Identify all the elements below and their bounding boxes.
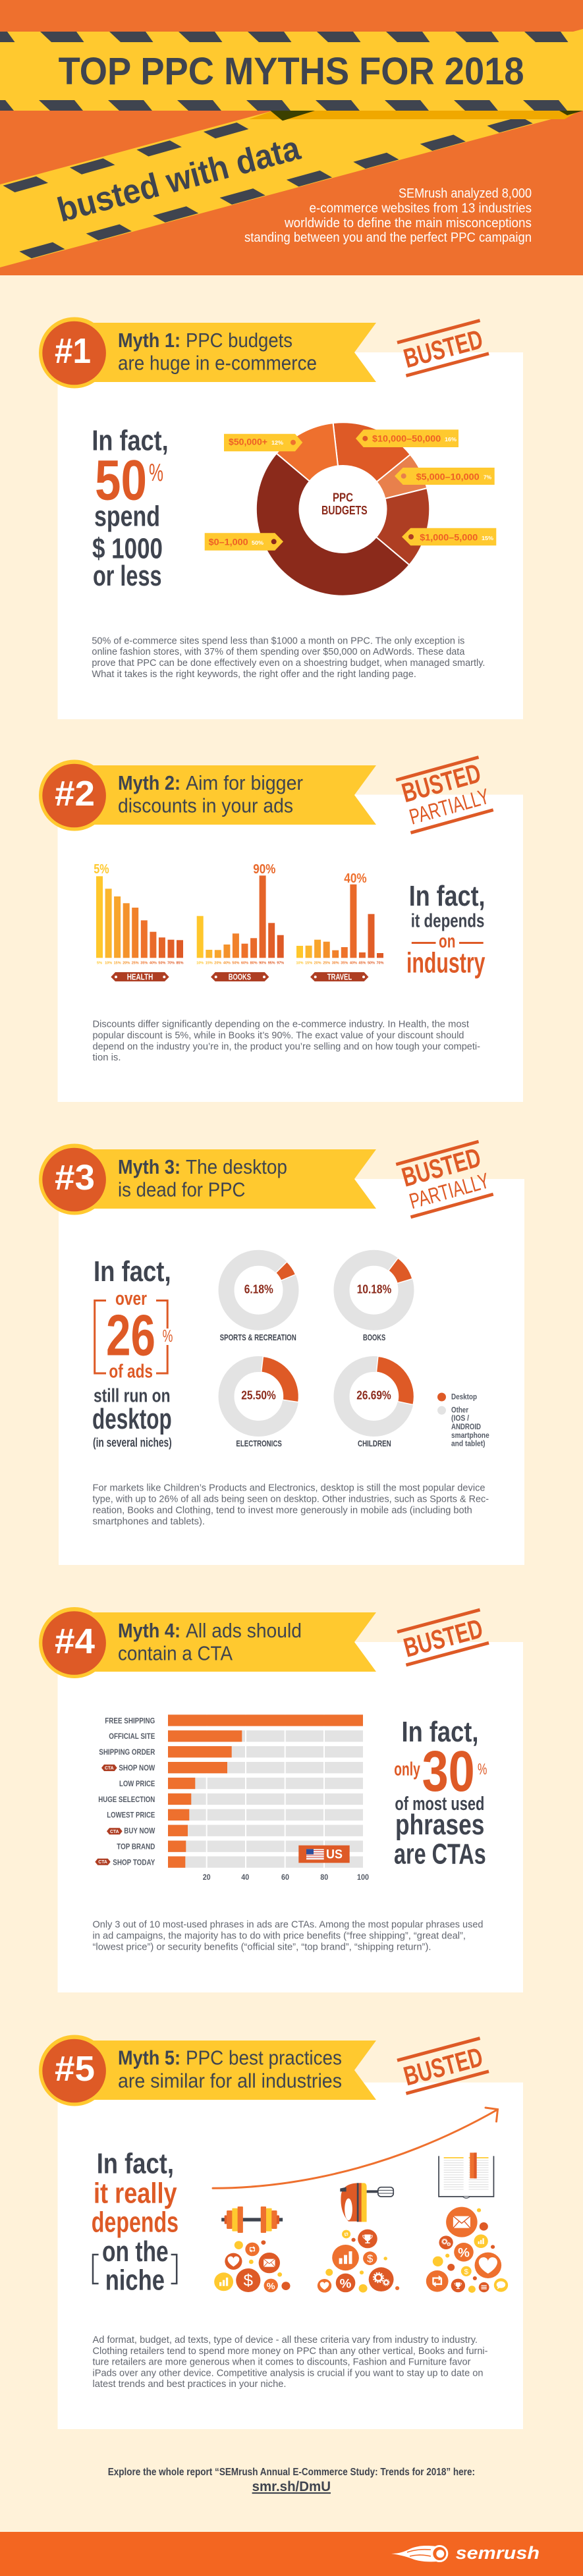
body paragraph: Ad format, budget, ad texts, type of device - all these criteria vary from industry to industry. <box>92 2334 478 2345</box>
chart: travel: 40% <box>344 871 367 886</box>
tag: $10,000-50,000: $10,000–50,000 <box>372 433 441 444</box>
bar labels: TOP BRAND <box>117 1842 155 1851</box>
CTA tags <box>95 1765 123 1865</box>
number badge: #3 <box>55 1158 95 1197</box>
chart: health: HEALTH <box>127 972 153 982</box>
chart: travel <box>296 871 384 982</box>
chart: travel: 70% <box>376 962 384 966</box>
call to action: report link: Explore the whole report “SEMrush Annual E-Commerce Study: Trends for 2018” here: <box>108 2467 475 2478</box>
title: TOP PPC MYTHS FOR 2018 <box>59 50 524 93</box>
donut: children: 26.69% <box>356 1389 391 1402</box>
myth heading: Aim for bigger <box>186 771 303 794</box>
myth heading: PPC budgets <box>186 329 292 352</box>
US badge <box>298 1846 350 1863</box>
myth heading: Myth 5: <box>118 2046 180 2069</box>
myth heading: is dead for PPC <box>118 1178 245 1201</box>
icon: dumbbell <box>221 2206 283 2233</box>
panel background <box>58 2083 523 2429</box>
donut: books: BOOKS <box>363 1332 386 1342</box>
icon group: home goods marketing bubbles: $ <box>367 2253 373 2265</box>
key fact text: phrases <box>395 1809 484 1841</box>
horizontal bar chart: most used phrases <box>95 1713 369 1882</box>
US badge: US <box>326 1848 343 1862</box>
body paragraph: in ad campaigns, the majority has to do with price benefits (“free shipping”, “great deal”, <box>92 1930 466 1941</box>
chart: travel: 40% <box>350 962 357 966</box>
body paragraph: depend on the industry you’re in, the product you’re selling and on how tough your competi- <box>92 1041 480 1052</box>
key fact text: 50 <box>95 449 147 512</box>
stamp: busted partially: BUSTED <box>399 757 484 808</box>
body paragraph: Only 3 out of 10 most-used phrases in ads are CTAs. Among the most popular phrases used <box>92 1919 484 1930</box>
bar labels: SHOP TODAY <box>113 1857 155 1867</box>
bar labels: FREE SHIPPING <box>105 1716 155 1725</box>
stamp: busted <box>397 319 489 377</box>
stamp: busted: BUSTED <box>401 2041 486 2091</box>
key fact text: In fact, <box>92 425 169 457</box>
axis labels: 40 <box>241 1873 250 1882</box>
bar labels: SHIPPING ORDER <box>99 1747 155 1757</box>
body paragraph <box>92 1019 480 1063</box>
call to action: report link: smr.sh/DmU <box>252 2479 331 2494</box>
number badge: #4 <box>55 1622 95 1661</box>
legend <box>437 1392 489 1448</box>
panel: myth 1 <box>39 317 523 719</box>
bar labels <box>98 1716 155 1867</box>
tag: $5,000-10,000 <box>395 468 495 485</box>
stamp: busted: BUSTED <box>401 323 486 373</box>
key fact text: of ads <box>109 1361 153 1383</box>
donut: books: 10.18% <box>357 1283 391 1296</box>
tag: $10,000-50,000 <box>356 429 458 447</box>
tag: $0-1,000: 50% <box>252 540 264 546</box>
key fact text: In fact, <box>402 1716 478 1748</box>
myth heading: Myth 3: <box>118 1155 180 1178</box>
intro text: e-commerce websites from 13 industries <box>310 202 532 216</box>
myth heading: Myth 2: <box>118 771 180 794</box>
myth heading: All ads should <box>186 1619 302 1642</box>
key fact text: % <box>478 1761 487 1778</box>
body paragraph: 50% of e-commerce sites spend less than $1000 a month on PPC. The only exception is <box>92 635 464 646</box>
body paragraph <box>92 1919 484 1952</box>
myth ribbon <box>86 765 376 825</box>
key fact text <box>92 425 169 592</box>
key fact text: on the <box>102 2235 169 2268</box>
icon group: fitness marketing bubbles <box>214 2240 291 2292</box>
icon group: home goods marketing bubbles <box>318 2230 399 2293</box>
chart centre label: BUDGETS <box>321 504 368 517</box>
key fact text: on <box>439 931 455 952</box>
chart: health: 70% <box>167 962 175 966</box>
legend: Other <box>451 1405 468 1414</box>
chart: health: 5% <box>94 862 109 877</box>
bar labels: BUY NOW <box>124 1826 155 1836</box>
tag: $1,000-5,000 <box>402 528 496 545</box>
key fact text: of most used <box>395 1794 484 1815</box>
chart: books: 15% <box>206 962 213 966</box>
key fact text: depends <box>92 2206 179 2238</box>
body paragraph: online fashion stores, with 37% of them spending over $50,000 on AdWords. These data <box>92 646 465 657</box>
panel: myth 4 <box>39 1607 523 1992</box>
donut: children: CHILDREN <box>358 1439 391 1448</box>
chart: books: 10% <box>196 962 204 966</box>
stamp: busted partially: PARTIALLY <box>406 784 492 829</box>
key fact text: it depends <box>411 911 484 932</box>
number badge <box>39 1607 110 1678</box>
number badge: #5 <box>55 2049 95 2089</box>
chart: books: 90% <box>253 862 275 877</box>
legend: and tablet) <box>451 1439 485 1448</box>
panel background <box>58 352 523 719</box>
key fact text: spend <box>94 501 160 532</box>
chart: health: 5% <box>97 962 102 966</box>
myth heading: Myth 4: <box>118 1619 180 1642</box>
body paragraph: For markets like Children’s Products and Electronics, desktop is still the most popular device <box>92 1483 485 1494</box>
stamp: busted partially: PARTIALLY <box>406 1168 492 1213</box>
tag: $50,000+: $50,000+ <box>229 437 267 447</box>
donut: children <box>341 1356 414 1448</box>
body paragraph: smartphones and tablets). <box>92 1516 205 1527</box>
chart: books: 80% <box>250 962 258 966</box>
header orange background <box>0 0 583 275</box>
key fact text: (in several niches) <box>93 1437 172 1450</box>
icon group: books marketing bubbles: $ <box>464 2268 469 2276</box>
chart: travel: 50% <box>368 962 375 966</box>
myth heading <box>118 329 317 374</box>
donut: electronics: ELECTRONICS <box>236 1439 282 1448</box>
chart: travel: 10% <box>296 962 304 966</box>
chart: travel: 15% <box>305 962 312 966</box>
CTA tags: CTA <box>98 1860 107 1865</box>
chart: books: 20% <box>214 962 221 966</box>
body paragraph: reation, Books and Clothing, tend to invest more generously in mobile ads (including both <box>92 1504 472 1516</box>
tag: $50,000+: 12% <box>271 440 283 446</box>
tag: $10,000-50,000: 16% <box>445 437 457 443</box>
chart: health: 50% <box>158 962 166 966</box>
CTA tags: CTA <box>110 1830 119 1834</box>
chart: books: 40% <box>223 962 231 966</box>
body paragraph <box>92 2334 487 2390</box>
chart: health: 20% <box>123 962 130 966</box>
donut: electronics: 25.50% <box>241 1389 276 1402</box>
tag: $1,000-5,000: $1,000–5,000 <box>420 532 478 542</box>
subtitle on tape: busted with data <box>53 129 304 230</box>
stamp: busted: BUSTED <box>401 1613 486 1663</box>
key fact text: still run on <box>94 1385 170 1406</box>
key fact text: are CTAs <box>394 1838 486 1870</box>
number badge <box>39 1143 110 1215</box>
axis labels <box>203 1873 369 1882</box>
myth heading: discounts in your ads <box>118 794 293 817</box>
myth heading <box>118 1619 302 1665</box>
number badge: #1 <box>55 331 91 371</box>
panel: myth 5 <box>39 2035 523 2429</box>
bar labels: HUGE SELECTION <box>98 1795 155 1804</box>
key fact text: $ 1000 <box>92 533 163 565</box>
donut: electronics <box>227 1356 299 1448</box>
tag: $5,000-10,000: 7% <box>484 474 491 481</box>
tag: $1,000-5,000: 15% <box>482 535 493 541</box>
stamp: busted partially: BUSTED <box>399 1142 484 1193</box>
chart centre label: PPC <box>333 491 353 505</box>
tag: $50,000+ <box>224 434 302 451</box>
stamp: busted partially <box>396 1140 493 1219</box>
diagonal caution tape <box>0 111 583 267</box>
chart: travel: 20% <box>314 962 321 966</box>
axis labels: 60 <box>281 1873 289 1882</box>
myth heading: PPC best practices <box>186 2046 342 2069</box>
bar labels: OFFICIAL SITE <box>109 1732 155 1741</box>
chart: books: 97% <box>277 962 284 966</box>
chart: health: 15% <box>114 962 121 966</box>
myth heading <box>118 2046 342 2093</box>
number badge: #2 <box>55 774 95 813</box>
donut: sports and recreation: SPORTS & RECREATION <box>220 1332 296 1342</box>
body paragraph: Discounts differ significantly depending on the e-commerce industry. In Health, the most <box>92 1019 470 1030</box>
arrow: rising trend <box>213 2108 498 2188</box>
key fact text: 30 <box>422 1740 475 1803</box>
axis labels: 20 <box>203 1873 211 1882</box>
icon group: fitness marketing bubbles: $ <box>244 2272 253 2290</box>
chart: health: 25% <box>132 962 139 966</box>
body paragraph: “lowest price”) or security benefits (“official site”, “top brand”, “shipping return”). <box>92 1941 431 1952</box>
chart: health: 35% <box>140 962 148 966</box>
donut: sports and recreation <box>220 1258 296 1342</box>
donut: sports and recreation: 6.18% <box>244 1283 273 1296</box>
legend: ANDROID <box>451 1422 481 1431</box>
CTA tags: CTA <box>105 1767 113 1770</box>
footer bar <box>0 2532 583 2576</box>
key fact text: desktop <box>92 1403 172 1435</box>
icon group: home goods marketing bubbles: % <box>340 2277 351 2291</box>
intro text: SEMrush analyzed 8,000 <box>399 186 532 201</box>
body paragraph: tion is. <box>92 1052 121 1063</box>
legend: (IOS / <box>451 1413 470 1423</box>
icon group: books marketing bubbles <box>426 2207 508 2293</box>
number badge <box>39 760 110 831</box>
chart: health: 40% <box>150 962 157 966</box>
body paragraph: latest trends and best practices in your niche. <box>92 2378 286 2390</box>
icon group: books marketing bubbles: % <box>458 2246 470 2261</box>
chart: health <box>94 862 184 982</box>
panel background <box>58 794 523 1102</box>
body paragraph: What it takes is the right keywords, the right offer and the right landing page. <box>92 669 416 680</box>
myth ribbon <box>86 2041 376 2100</box>
key fact text: In fact, <box>94 1255 171 1288</box>
body paragraph <box>92 1483 489 1527</box>
chart centre label <box>321 491 368 517</box>
chart: books: 50% <box>232 962 240 966</box>
header banner <box>0 0 583 275</box>
chart: books: BOOKS <box>229 972 251 982</box>
axis labels: 80 <box>320 1873 329 1882</box>
myth heading: are huge in e-commerce <box>118 352 317 374</box>
key fact text: industry <box>406 947 486 979</box>
panel: myth 3 <box>39 1140 524 1565</box>
chart: health: 85% <box>176 962 184 966</box>
key fact text <box>92 1255 173 1450</box>
tag: $5,000-10,000: $5,000–10,000 <box>416 471 480 481</box>
key fact text: % <box>149 459 163 487</box>
chart: books <box>196 862 284 982</box>
tag: $0-1,000 <box>205 533 283 551</box>
legend: Desktop <box>451 1392 477 1401</box>
number badge <box>39 317 110 389</box>
body paragraph: Clothing retailers tend to spend more money on PPC than any other vertical, Books and furni- <box>92 2345 487 2357</box>
panel background <box>58 1642 523 1992</box>
top caution tape <box>0 29 583 111</box>
chart: travel: 45% <box>358 962 366 966</box>
key fact text: over <box>115 1288 147 1309</box>
chart: travel: 25% <box>323 962 330 966</box>
key fact text: 26 <box>106 1302 155 1367</box>
myth ribbon <box>86 1149 376 1209</box>
donut chart: PPC budgets <box>205 422 496 596</box>
donut: books <box>341 1258 412 1342</box>
key fact text: only <box>394 1759 420 1780</box>
legend: smartphone <box>451 1431 489 1440</box>
number badge <box>39 2035 110 2106</box>
SEMrush logo: semrush <box>456 2543 540 2563</box>
key fact text <box>394 1716 487 1870</box>
chart: books: 90% <box>259 962 266 966</box>
myth ribbon <box>86 1612 376 1672</box>
intro text: standing between you and the perfect PPC campaign <box>244 231 532 245</box>
key fact text: In fact, <box>97 2147 174 2179</box>
panel background <box>59 1179 524 1565</box>
body paragraph: iPads over any other device. Competitive analysis is crucial if you want to stay up to date on <box>92 2367 484 2378</box>
chart: travel: TRAVEL <box>327 972 352 982</box>
bar charts: discounts by industry <box>94 862 384 982</box>
bar labels: LOWEST PRICE <box>107 1811 155 1820</box>
icon: open book <box>439 2152 493 2198</box>
bar labels: LOW PRICE <box>119 1779 155 1788</box>
key fact text: % <box>163 1326 173 1346</box>
myth heading: contain a CTA <box>118 1642 233 1665</box>
icon: hand mixer <box>340 2183 393 2222</box>
myth heading <box>118 771 303 817</box>
panel: myth 2 <box>39 755 523 1102</box>
myth heading: Myth 1: <box>118 329 180 352</box>
stamp: busted <box>397 2037 489 2095</box>
call to action: report link <box>108 2467 475 2494</box>
key fact text: or less <box>93 560 162 592</box>
bar labels: SHOP NOW <box>119 1763 155 1772</box>
key fact text <box>406 880 486 979</box>
tag: $0-1,000: $0–1,000 <box>209 536 248 547</box>
myth ribbon <box>86 323 376 382</box>
body paragraph: popular discount is 5%, while in Books it’s 90%. The exact value of your discount should <box>92 1030 464 1041</box>
body paragraph <box>92 635 485 680</box>
SEMrush logo <box>391 2543 540 2563</box>
chart: books: 60% <box>241 962 248 966</box>
body paragraph: prove that PPC can be done effectively even on a shoestring budget, when managed smartly. <box>92 657 485 669</box>
chart: books: 95% <box>268 962 275 966</box>
myth heading: The desktop <box>186 1155 287 1178</box>
chart: health: 10% <box>105 962 112 966</box>
body paragraph: type, with up to 26% of all ads being seen on desktop. Other industries, such as Sports & Rec- <box>92 1494 489 1504</box>
key fact text: it really <box>94 2178 177 2209</box>
myth heading <box>118 1155 287 1201</box>
body paragraph: ture retailers are more generous when it comes to discounts, Fashion and Furniture favor <box>92 2357 471 2367</box>
key fact text: In fact, <box>409 880 485 912</box>
chart: travel: 30% <box>332 962 339 966</box>
axis labels: 100 <box>357 1873 369 1882</box>
niche illustrations <box>214 2152 508 2293</box>
intro text: worldwide to define the main misconceptions <box>284 216 532 231</box>
intro text <box>244 186 532 245</box>
chart: travel: 35% <box>341 962 348 966</box>
key fact text: niche <box>105 2264 165 2296</box>
myth heading: are similar for all industries <box>118 2069 342 2093</box>
key fact text <box>92 2147 179 2296</box>
stamp: busted partially <box>396 755 493 835</box>
icon group: fitness marketing bubbles: % <box>267 2282 275 2291</box>
stamp: busted <box>397 1608 489 1666</box>
